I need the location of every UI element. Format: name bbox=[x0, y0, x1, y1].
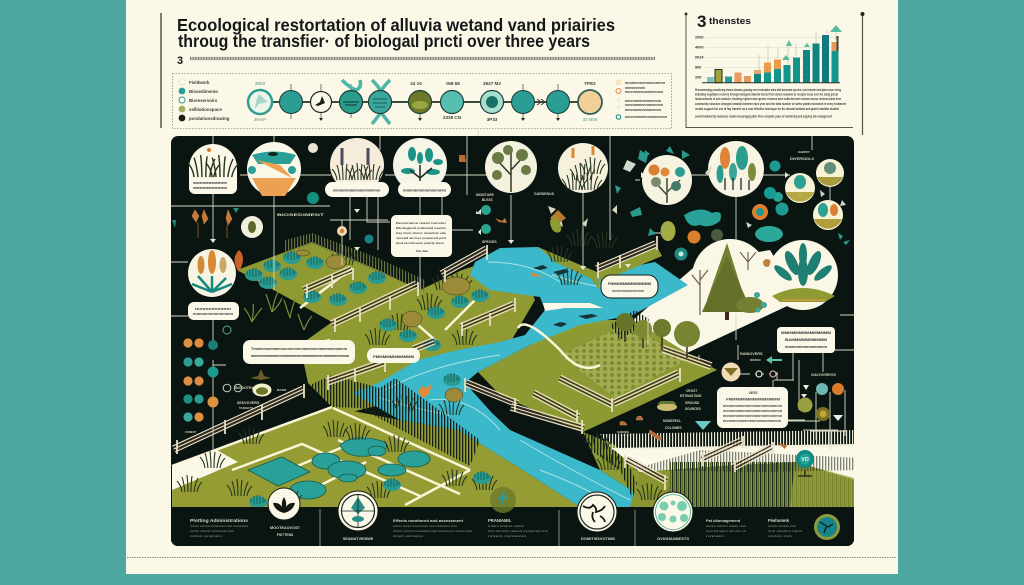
footer item: practices: PRANIAMIL bbox=[488, 518, 512, 523]
small circles: plant stages bbox=[785, 159, 844, 230]
card: wide text band: mmmmmmmmmmmmmmmmmmmmmmmmmmmmmmm bbox=[251, 353, 349, 358]
footer item: paired notes: Piwhomnk bbox=[768, 518, 790, 523]
small labels on dark panel: TARGETS bbox=[239, 406, 253, 410]
right legend: nnnnnnnnmnnnnnnnnnn bbox=[625, 115, 667, 119]
chart axis labels bbox=[695, 36, 704, 80]
bottom dotted rule bbox=[127, 556, 897, 558]
footer item: paired notes: nnnnn bbox=[706, 534, 725, 538]
circle: shrub bbox=[485, 141, 537, 193]
footer item: paired notes: mmm nnnnn mmm nnn bbox=[706, 524, 746, 528]
small labels on dark panel: CROST bbox=[686, 389, 697, 393]
ponds bbox=[248, 438, 430, 499]
chart description text: Phenomenology monitoring shows biomass growing over restoration sites with dominant species, seed transfer and plant cover rising bbox=[695, 88, 841, 92]
small labels on dark panel: BIOSEDIMENT bbox=[277, 213, 325, 217]
footer item: paired notes: Pal idiomagement bbox=[706, 518, 741, 523]
timeline labels: 32 N00 bbox=[583, 117, 598, 122]
small labels on dark panel: DIVERSIOLS bbox=[790, 156, 814, 161]
timeline labels: 3HAP bbox=[254, 117, 266, 122]
right legend: nnnnnnmnnnnnnnnnn bbox=[625, 103, 663, 107]
card: central text box: Restoration reach transfer bbox=[396, 221, 447, 225]
small labels on dark panel: SEDVOVERS bbox=[237, 401, 260, 405]
lower wetland plots ground bbox=[172, 407, 580, 507]
cream poster sheet bbox=[126, 0, 898, 574]
footer item: practices bbox=[488, 487, 548, 538]
card: right text box: MMMMMMMMMMMMMM bbox=[781, 331, 831, 335]
right legend bbox=[616, 80, 667, 119]
footer item: management: mmm nnnnn mmmmm nnn mmmmm nnn bbox=[393, 524, 457, 528]
footer item: plotting bbox=[190, 488, 301, 538]
card: wide text band: Tmmmmmmmmnnnnnnnnmmmmmmmmmmmmmm bbox=[251, 346, 347, 351]
footer item: plotting: MOOTEAOVOST bbox=[270, 526, 301, 530]
pill under left circle: mmmmmmmm bbox=[195, 307, 231, 311]
footer item: outcomes: OVIOHANNESTS bbox=[657, 536, 689, 541]
right legend: nnnnmnnnnnnnnnnnn bbox=[625, 81, 665, 85]
right legend: nnnnnnnnnnmnnnnn bbox=[625, 99, 661, 103]
legend bbox=[179, 79, 230, 121]
card: lower right text box: nnnnnnnnnnnnnnnnnnnnnnnnnn bbox=[723, 414, 782, 418]
timeline labels: TPE2 bbox=[584, 81, 596, 86]
small labels on dark panel: HABITAT bbox=[798, 150, 810, 154]
subtitle line: 3 bbox=[177, 55, 183, 67]
footer item: practices: nnnnn mmmmm bbox=[488, 534, 527, 538]
left column icons bbox=[183, 326, 272, 422]
pill: small label: PMMMMMMMMMMM bbox=[373, 354, 415, 359]
bars bbox=[702, 25, 842, 83]
clearing trees bbox=[616, 313, 700, 358]
footer item: dominant species: DOMITIIISVOTIMS bbox=[581, 536, 615, 541]
main illustrated dark panel bbox=[171, 136, 854, 546]
footer item: paired notes: nnnnn mm bbox=[768, 534, 793, 538]
card: top-left circle with grass bbox=[188, 144, 238, 194]
upper meadow bbox=[237, 242, 535, 415]
card: lower right text box bbox=[717, 387, 788, 428]
chart description text: measurements of soil moisture, flooding regimes and species richness were collected each season across restored plots here bbox=[695, 97, 841, 101]
timeline labels: 24 10 bbox=[410, 81, 422, 86]
teal shrubs bbox=[245, 251, 491, 508]
card: lower right text box: PMMMMMMMMMMMMMMM bbox=[726, 398, 780, 402]
card: central text box: Site data bbox=[416, 249, 428, 253]
small labels on dark panel: SPECIES bbox=[482, 240, 497, 244]
pill: river label: FMMMMMMMMMMMMM bbox=[608, 282, 651, 286]
reeds on white band bbox=[630, 450, 860, 472]
legend: pondationsdrawing bbox=[189, 116, 230, 121]
card: lower right text box: nnnnnnnnnnnnnnnnnnnnnnnnnn bbox=[723, 409, 782, 413]
animals in river bbox=[533, 265, 598, 327]
card: right text box bbox=[777, 327, 835, 353]
title: Ecoological restortation of alluvia wetand vand priairies bbox=[177, 15, 615, 35]
chart heading bbox=[697, 12, 751, 31]
reeds along upper meadow bbox=[285, 233, 425, 292]
chart description text: indicating vegetation recovery through biological material moved from donor meadows to receptor areas over the study period bbox=[695, 92, 838, 96]
middle right meadow bbox=[478, 320, 717, 432]
pill under left circle: mmmmmmmmmmm bbox=[193, 312, 233, 316]
card: central text box: Biological material seeds bbox=[396, 226, 446, 230]
big clearing circle: conifer bbox=[692, 239, 771, 320]
circle: flowering tree bbox=[642, 155, 692, 205]
footer item: practices: nnn mmmm nnnnn mmmmm nnn bbox=[488, 529, 548, 533]
chart description text: overall biodiversity outcomes remain encouraging after three complete years of monitoring and ongoing site management bbox=[695, 114, 833, 118]
chart heading: thenstes bbox=[709, 16, 751, 27]
small labels on dark panel: SHRUBS bbox=[617, 430, 629, 434]
footer item: plotting: Plotting Administrations bbox=[190, 518, 249, 523]
small labels on dark panel: MONITOR bbox=[654, 231, 669, 235]
title: throug the transfier· of biologaɩl prıcti over three years bbox=[178, 31, 590, 51]
timeline axis and nodes bbox=[248, 80, 602, 124]
right grass bank bbox=[583, 432, 640, 492]
teal and orange round icons bbox=[307, 143, 850, 260]
reed band across centre bbox=[310, 375, 480, 466]
footer item: paired notes: nnn mmmm nnnn bbox=[768, 529, 802, 533]
card: central text box: hay from donor meadow site bbox=[396, 231, 446, 235]
river bbox=[352, 247, 688, 507]
circle and pill: leaf species: mmmmmmmmmmmm bbox=[403, 188, 446, 192]
signpost with circle: VD bbox=[801, 457, 809, 463]
cream corner of lower-left bbox=[172, 449, 238, 490]
fences bbox=[172, 236, 773, 490]
chart axis labels: 4000 bbox=[695, 46, 703, 50]
tan bushes bbox=[296, 250, 470, 402]
small labels on dark panel: MONSPECL bbox=[663, 419, 681, 423]
title bbox=[177, 15, 615, 51]
cream paddle bbox=[543, 303, 603, 311]
small labels on dark panel: GROUND bbox=[685, 401, 700, 405]
small labels on dark panel: BASIN bbox=[277, 388, 286, 392]
pill under left circle bbox=[188, 302, 239, 320]
timeline labels: 3P33 bbox=[487, 117, 498, 122]
tufts and reeds bbox=[177, 229, 662, 505]
footer item: paired notes: nnn mmmm nnnnn nn bbox=[706, 529, 746, 533]
chart panel bbox=[684, 12, 864, 135]
footer item: paired notes bbox=[706, 514, 840, 540]
card: lower right text box: nnnnnnnnnnnnnnnnnnnnnnnnnn bbox=[723, 404, 782, 408]
signpost with circle bbox=[796, 450, 814, 476]
left header rule bbox=[160, 13, 162, 128]
chart description text: community structure changed steadily between each year and the total number of native plants increased in every treatment bbox=[695, 102, 847, 106]
small labels on dark panel: MOISTURE bbox=[476, 193, 495, 197]
timeline labels: 3803 bbox=[255, 81, 266, 86]
card: right text box: BAMMMMMMMMMM bbox=[785, 338, 827, 342]
small labels on dark panel: GARDENUS bbox=[534, 192, 555, 196]
footer item: management bbox=[338, 491, 473, 541]
right legend: nnnnnnnnnnnnmnnn bbox=[625, 108, 661, 112]
small arrows bbox=[210, 172, 807, 398]
circle: teal and orange bands bbox=[247, 142, 301, 196]
footer item: management: SEAMATVEISWE bbox=[343, 537, 374, 541]
legend: vellitationspace bbox=[189, 107, 223, 112]
card: top-left circle with grass: mmmmmmmmmmmmmmm bbox=[193, 181, 227, 185]
pill: river label bbox=[601, 275, 658, 298]
right column lower icons bbox=[620, 356, 846, 449]
card: right text box: mmmmmmmmmmmm bbox=[785, 345, 827, 349]
right legend: mnnnnnnnn bbox=[625, 86, 645, 90]
timeline labels: IN8 68 bbox=[446, 81, 460, 86]
small labels on dark panel: FOREST bbox=[185, 430, 197, 434]
circle and pill: reed species: mmmmmmmmmmmmmm bbox=[333, 188, 380, 192]
small labels on dark panel: BLESS bbox=[482, 198, 493, 202]
timeline labels: 3338 CN bbox=[443, 115, 462, 120]
chart gridlines bbox=[705, 38, 840, 78]
footer band bbox=[171, 507, 854, 546]
reed plants on dark wedge bbox=[244, 292, 312, 330]
footer item: outcomes bbox=[653, 492, 693, 541]
card: lower right text box: nnnnnnnnnnnnnnnnnnnnnnnnnn bbox=[723, 419, 781, 423]
cultivated shrubs patch bbox=[560, 325, 690, 398]
white paths bbox=[172, 268, 600, 506]
connector lines bbox=[171, 130, 854, 450]
chart description text bbox=[695, 88, 847, 118]
footer item: management: nnnnn mmmmm bbox=[393, 534, 424, 538]
pill: river label: mmmmmmmmmm bbox=[612, 289, 644, 293]
legend: Biosedimento bbox=[189, 89, 218, 94]
small labels on dark panel: COLONIES bbox=[665, 426, 682, 430]
legend: Fieldwork bbox=[189, 80, 210, 85]
chart axis labels: 200 bbox=[695, 76, 701, 80]
footer item: dominant species bbox=[577, 492, 617, 541]
small labels on dark panel: BIODOTRACE bbox=[235, 386, 260, 390]
small labels on dark panel: ESTIMATIONS bbox=[680, 394, 702, 398]
right legend: nnnnnnnnnmnnnnnnn bbox=[625, 90, 663, 94]
chart description text: results support the use of hay transfer as a cost effective technique for the alluvial wetland and prairie habitats studied bbox=[695, 107, 839, 111]
chart heading: 3 bbox=[697, 12, 706, 31]
footer dividers bbox=[320, 509, 635, 546]
circle: reed clump bbox=[558, 143, 608, 193]
chart axis labels: 0024 bbox=[695, 56, 704, 60]
footer item: plotting: mmm nnnnn mmmmm nnn mmmmm bbox=[190, 524, 249, 528]
timeline panel bbox=[172, 74, 672, 128]
timeline labels bbox=[254, 81, 598, 122]
circle: mixed plants bbox=[708, 141, 764, 197]
small labels on dark panel: WATER bbox=[750, 358, 761, 362]
card: central text box bbox=[391, 215, 452, 257]
footer item: practices: mmm nnnnn mmm bbox=[488, 524, 525, 528]
card: central text box: and monitored yearly here bbox=[396, 241, 444, 245]
small labels on dark panel: SOURCES bbox=[685, 407, 701, 411]
small labels on dark panel: RAINOVERS bbox=[740, 352, 763, 356]
footer item: plotting: nnnnn mmmmm bbox=[190, 534, 223, 538]
card: lower right text box: UESS bbox=[749, 391, 758, 395]
chart axis labels: 800 bbox=[695, 66, 701, 70]
white marsh band bbox=[613, 444, 854, 480]
circle and pill: reed species bbox=[325, 138, 389, 197]
small labels on dark panel: GAVOVIREVS bbox=[811, 373, 836, 377]
footer item: plotting: mmm nnnnn mmmmm nnn bbox=[190, 529, 234, 533]
footer item: management: mmm nnnnn mmmmm nnn mmmmm nnnnn mm bbox=[393, 529, 473, 533]
timeline labels: 3647 M2 bbox=[483, 81, 501, 86]
legend: Bioreservoirs bbox=[189, 98, 218, 103]
footer item: management: Effects monitored and assessment bbox=[393, 518, 464, 523]
cream diagonal clearing bbox=[633, 250, 800, 353]
left circle: orange seed heads bbox=[188, 249, 236, 297]
card: top-left circle with grass: mmmmmmmmmmmmmmm bbox=[193, 186, 227, 190]
card: wide text band bbox=[243, 340, 355, 364]
reeds on wedge base bbox=[610, 310, 650, 340]
big clearing circle: fern bbox=[768, 240, 838, 310]
footer item: plotting: PSITTENS bbox=[277, 533, 294, 537]
circle and pill: leaf species bbox=[393, 138, 451, 197]
pill: small label bbox=[367, 348, 420, 363]
footer item: paired notes: mmm nnnnn mm bbox=[768, 524, 797, 528]
card: central text box: spread across prepared plot bbox=[396, 236, 446, 240]
lower right meadow bbox=[630, 462, 854, 507]
landscape illustration bbox=[172, 229, 860, 508]
bank above river bbox=[538, 247, 600, 290]
small labels on dark panel bbox=[185, 150, 836, 434]
chart axis labels: 2000 bbox=[695, 36, 703, 40]
orange leaf icons bbox=[172, 155, 466, 272]
